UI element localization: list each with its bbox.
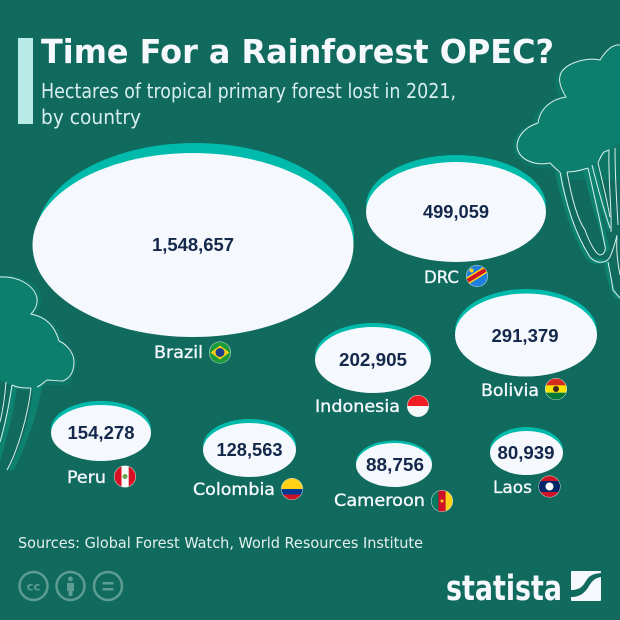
label: Colombia: Colombia xyxy=(193,480,275,500)
label: Laos: Laos xyxy=(493,478,532,498)
icon: attribution xyxy=(56,572,84,600)
bubble: Indonesia: 202,905 xyxy=(339,349,407,370)
trunk shadows xyxy=(555,172,608,264)
label: Brazil xyxy=(154,342,231,364)
label: Cameroon xyxy=(334,490,453,512)
bubble: Laos xyxy=(490,427,563,475)
source note: Sources: Global Forest Watch, World Resources Institute xyxy=(18,534,423,552)
label: DRC: DRC xyxy=(424,268,459,288)
label: Peru: Peru xyxy=(67,468,106,488)
label: Brazil: Brazil xyxy=(154,343,203,363)
title accent bar xyxy=(18,38,33,124)
flag: Colombia xyxy=(281,478,303,500)
canopy xyxy=(0,277,74,388)
canopy xyxy=(517,45,620,172)
bubble: Brazil xyxy=(32,143,354,337)
label: Indonesia xyxy=(315,395,429,417)
label: Peru xyxy=(67,466,136,488)
bubble: Brazil: 1,548,657 xyxy=(152,234,234,255)
bubble: Laos: 80,939 xyxy=(498,442,554,463)
bubble: DRC xyxy=(366,155,546,262)
flag: Laos xyxy=(538,476,560,498)
bubble: Peru xyxy=(51,401,151,461)
label: Bolivia xyxy=(481,378,567,401)
trunk lines xyxy=(560,172,617,262)
canopy shadow xyxy=(513,60,620,180)
icon: right tree xyxy=(513,45,620,300)
flag: Cameroon xyxy=(431,490,453,512)
bubble: Indonesia xyxy=(315,323,431,393)
icon: license badges xyxy=(20,572,122,600)
bubble: Colombia: 128,563 xyxy=(216,439,282,460)
flag: DRC xyxy=(466,265,488,287)
subtitle: Hectares of tropical primary forest lost in 2021, xyxy=(41,79,456,103)
icon: left tree xyxy=(0,275,78,470)
icon: cc: cc xyxy=(27,580,40,594)
icon: statista mark xyxy=(571,571,601,601)
statista logo: statista xyxy=(446,569,562,609)
trunk shadows xyxy=(8,386,42,470)
label: Indonesia: Indonesia xyxy=(315,397,400,417)
flag: Brazil xyxy=(209,342,231,364)
bubble: Cameroon: 88,756 xyxy=(366,454,424,475)
label: Laos xyxy=(493,476,560,498)
title: Time For a Rainforest OPEC? xyxy=(41,32,554,71)
flag: Bolivia xyxy=(545,378,567,400)
icon: no derivatives xyxy=(94,572,122,600)
bubble: Bolivia xyxy=(455,289,597,376)
bubble: Cameroon xyxy=(356,440,432,487)
flag: Indonesia xyxy=(407,395,429,417)
label: Bolivia: Bolivia xyxy=(481,381,539,401)
bubble: Colombia xyxy=(203,419,296,477)
subtitle: by country xyxy=(41,105,141,129)
bubble: Bolivia: 291,379 xyxy=(492,325,558,346)
canopy shadow xyxy=(0,275,78,392)
label: Colombia xyxy=(193,478,303,500)
bubble: DRC: 499,059 xyxy=(423,201,489,222)
subtitle xyxy=(41,79,456,129)
bubble: Peru: 154,278 xyxy=(68,422,134,443)
label: DRC xyxy=(424,265,490,288)
canopy outline xyxy=(517,45,620,172)
flag: Peru xyxy=(114,466,136,488)
label: Cameroon: Cameroon xyxy=(334,491,425,511)
